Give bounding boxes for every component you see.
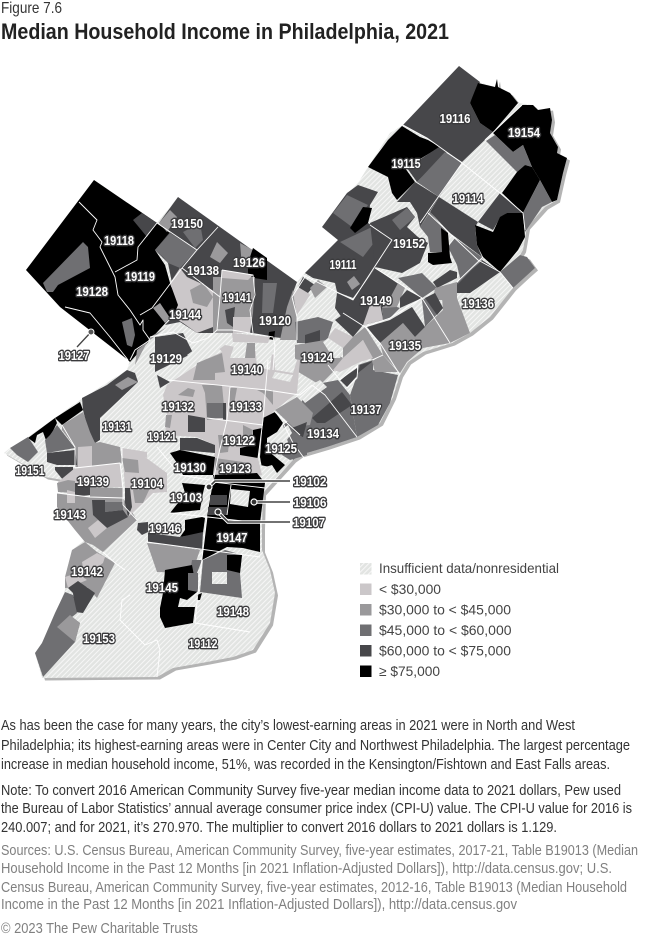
ZIP code labels: 19129	[150, 351, 182, 366]
ZIP code labels: 19125	[265, 441, 297, 456]
ZIP code labels: 19140	[231, 362, 263, 377]
north and Kensington tracts	[275, 277, 398, 460]
ZIP code labels: 19137	[350, 402, 382, 417]
ZIP code labels: 19116	[440, 111, 470, 126]
northwest tracts	[26, 180, 310, 362]
callout: 19106	[251, 499, 290, 505]
west tracts	[10, 370, 167, 677]
note: 240.007; and for 2021, it’s 270.970. The multiplier to convert 2016 dollars to 2021 dollars is 1.129.	[1, 820, 557, 836]
callout: 19107	[215, 509, 290, 522]
river shadow	[7, 68, 570, 680]
ZIP code labels: 19148	[217, 604, 249, 619]
legend: $75,000 or more: ≥ $75,000	[379, 663, 440, 679]
note	[1, 783, 632, 836]
ZIP code labels: 19143	[54, 507, 86, 522]
ZIP code labels: 19102	[294, 474, 326, 489]
legend: $60,000 to $75,000: $60,000 to < $75,000	[379, 642, 511, 658]
ZIP code labels: 19112	[188, 636, 218, 651]
ZIP code labels: 19130	[174, 460, 206, 475]
sources: Income in the Past 12 Months [in 2021 Inflation-Adjusted Dollars]), http://data.census.gov	[1, 897, 518, 913]
ZIP code labels: 19153	[83, 631, 115, 646]
ZIP code labels: 19147	[216, 530, 248, 545]
central north tracts	[135, 327, 307, 482]
ZIP code labels: 19131	[102, 419, 132, 434]
legend	[360, 560, 559, 679]
ZIP code labels: 19114	[452, 191, 484, 206]
legend: $30,000 to $45,000: $30,000 to < $45,000	[379, 602, 511, 618]
ZIP code labels: 19106	[294, 495, 326, 510]
ZIP code labels	[16, 111, 541, 651]
ZIP code labels: 19126	[233, 255, 265, 270]
center city and south tracts	[137, 465, 275, 628]
ZIP code labels: 19145	[146, 580, 178, 595]
legend: insufficient data: Insufficient data/nonresidential	[379, 560, 559, 576]
title: Median Household Income in Philadelphia, 2021	[1, 19, 449, 44]
ZIP code labels: 19141	[222, 290, 252, 305]
ZIP code labels: 19150	[171, 216, 203, 231]
ZIP code labels: 19111	[330, 257, 356, 272]
callout: 19127	[77, 329, 94, 347]
ZIP code labels: 19138	[187, 263, 219, 278]
summary paragraph: As has been the case for many years, the city’s lowest-earning areas in 2021 were in North and West	[1, 718, 575, 734]
ZIP code labels: 19139	[77, 474, 109, 489]
ZIP code labels: 19134	[307, 426, 340, 441]
ZIP code labels: 19121	[148, 429, 176, 444]
ZIP code labels: 19118	[104, 233, 134, 248]
ZIP code labels: 19124	[301, 350, 334, 365]
ZIP code labels: 19146	[149, 521, 181, 536]
base: insufficient data / nonresidential areas	[4, 66, 567, 678]
ZIP code labels: 19127	[58, 348, 90, 363]
northeast tracts	[305, 66, 567, 373]
ZIP code labels: 19133	[230, 399, 262, 414]
ZIP code labels: 19151	[16, 463, 44, 478]
ZIP code labels: 19103	[170, 490, 202, 505]
summary paragraph	[1, 718, 630, 773]
ZIP code labels: 19149	[360, 293, 392, 308]
legend: $45,000 to $60,000: $45,000 to < $60,000	[379, 622, 512, 638]
choropleth map of Philadelphia ZIP codes	[4, 66, 570, 680]
ZIP code labels: 19119	[125, 269, 155, 284]
ZIP code labels: 19142	[71, 564, 103, 579]
ZIP code labels: 19107	[293, 515, 325, 530]
ZIP code labels: 19120	[259, 313, 291, 328]
ZIP code boundaries	[57, 105, 525, 677]
figure number: Figure 7.6	[1, 0, 62, 17]
ZIP code labels: 19122	[223, 433, 255, 448]
ZIP code labels: 19152	[393, 236, 425, 251]
ZIP code labels: 19115	[392, 156, 420, 171]
ZIP code labels: 19104	[131, 476, 164, 491]
callout: 19102	[206, 481, 290, 490]
ZIP code labels: 19144	[169, 307, 202, 322]
legend: under $30,000: < $30,000	[379, 581, 441, 597]
sources	[1, 843, 638, 913]
ZIP code labels: 19128	[76, 284, 108, 299]
ZIP code labels: 19154	[508, 125, 541, 140]
ZIP code labels: 19132	[162, 399, 194, 414]
ZIP code labels: 19123	[219, 461, 251, 476]
ZIP code labels: 19136	[462, 296, 494, 311]
ZIP code labels: 19135	[389, 338, 421, 353]
